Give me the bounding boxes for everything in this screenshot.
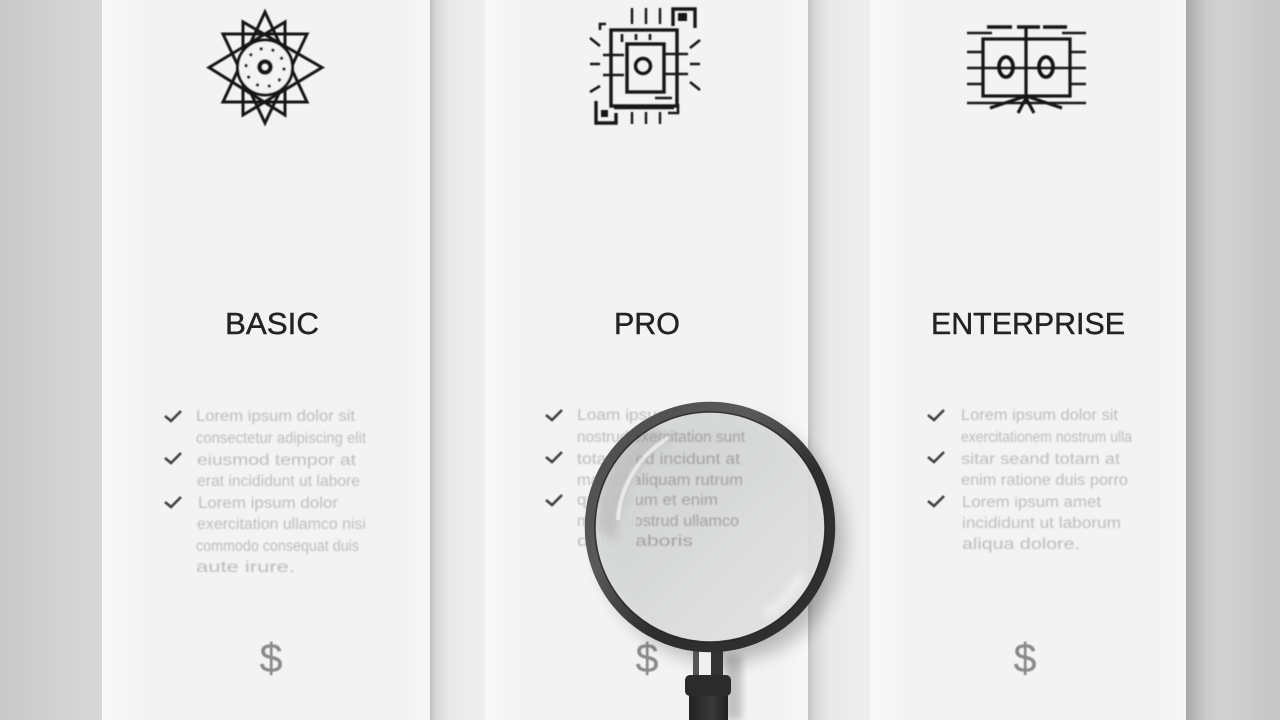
price: enterprise: $ — [1014, 635, 1037, 681]
price: pro: $ — [636, 635, 659, 681]
feature list: aute irure. — [196, 559, 295, 576]
check marks — [928, 410, 944, 506]
heading: basic: BASIC — [225, 306, 319, 341]
text seen through lens: nostrud exercitation sunt — [577, 429, 746, 446]
panel: pro — [485, 0, 808, 720]
feature list: Lorem ipsum dolor sit — [961, 407, 1119, 424]
feature list — [961, 407, 1132, 553]
feature list: sitar seand totam at — [961, 451, 1121, 468]
text seen through lens — [636, 430, 746, 546]
icon: chip — [590, 8, 700, 124]
feature list: quis ipsum et enim — [577, 492, 718, 509]
heading: enterprise: ENTERPRISE — [931, 306, 1125, 341]
check marks — [165, 411, 181, 507]
feature list: nostrud exercitation sunt — [577, 429, 746, 446]
feature list: commodo consequat duis — [196, 538, 359, 555]
feature list: dolor laboris — [577, 533, 693, 550]
text seen through lens: dolor laboris — [577, 533, 693, 550]
lens rim — [590, 407, 830, 647]
feature list: Lorem ipsum amet — [962, 494, 1102, 511]
lens glare — [598, 425, 672, 540]
price: basic: $ — [260, 635, 283, 681]
panel: enterprise — [870, 0, 1186, 720]
lens — [595, 412, 825, 642]
feature list: enim ratione duis porro — [961, 472, 1128, 489]
text seen through lens: magna aliquam rutrum — [577, 472, 743, 489]
heading: pro: PRO — [614, 306, 680, 341]
handle — [685, 648, 731, 720]
feature list: erat incididunt ut labore — [197, 473, 360, 490]
feature list: Loam ipsum dolor sit — [577, 407, 738, 424]
text seen through lens: quis ipsum et enim — [577, 492, 718, 509]
feature list: consectetur adipiscing elit — [196, 430, 367, 447]
magnifying glass — [577, 407, 844, 720]
right edge shadow — [1186, 0, 1236, 720]
icon: open book — [967, 27, 1086, 113]
feature list: Lorem ipsum dolor sit — [196, 408, 356, 425]
feature list: minim nostrud ullamco — [577, 513, 739, 530]
gutter shadow: pro to enterprise — [808, 0, 870, 720]
feature list: exercitation ullamco nisi — [197, 516, 366, 533]
icon: geometric star — [209, 12, 322, 123]
text seen through lens: minim nostrud ullamco — [577, 513, 739, 530]
feature list — [577, 407, 746, 550]
feature list: exercitationem nostrum ulla — [961, 429, 1132, 446]
feature list: aliqua dolore. — [962, 536, 1080, 553]
gutter shadow: basic to pro — [430, 0, 485, 720]
feature list: Lorem ipsum dolor — [198, 495, 338, 512]
panel: basic — [102, 0, 430, 720]
feature list — [196, 408, 367, 576]
text seen through lens: totam sed incidunt at — [577, 451, 741, 468]
feature list: magna aliquam rutrum — [577, 472, 743, 489]
check marks — [546, 410, 562, 505]
feature list: incididunt ut laborum — [962, 515, 1121, 532]
feature list: totam sed incidunt at — [577, 451, 741, 468]
feature list: eiusmod tempor at — [197, 452, 357, 469]
